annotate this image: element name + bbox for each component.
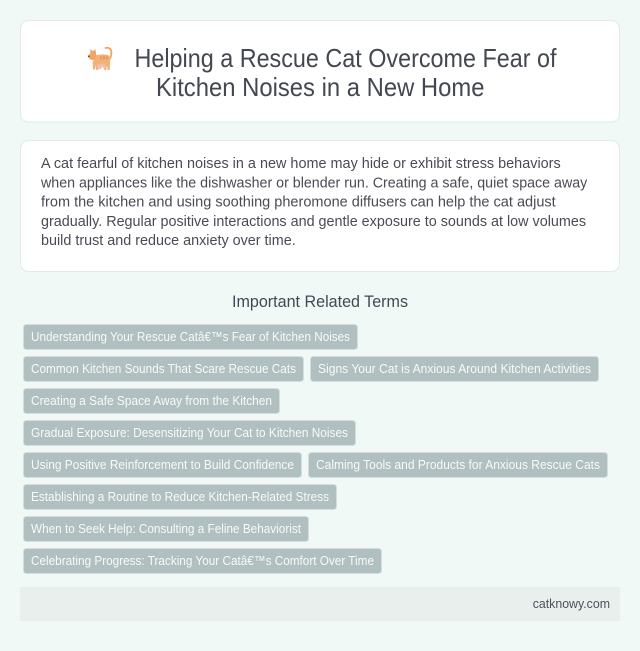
summary paragraph: from the kitchen and using soothing pheromone diffusers can help the cat adjust [41, 194, 556, 211]
chip: anxiety signs: Signs Your Cat is Anxious Around Kitchen Activities [318, 361, 591, 376]
chip: gradual exposure: Gradual Exposure: Desensitizing Your Cat to Kitchen Noises [31, 425, 348, 440]
summary paragraph: when appliances like the dishwasher or blender run. Creating a safe, quiet space away [40, 174, 588, 191]
chip: common sounds [24, 356, 304, 382]
heading: related terms: Important Related Terms [232, 292, 408, 311]
summary paragraph: build trust and reduce anxiety over time. [41, 232, 296, 249]
chip: seek help [24, 516, 308, 542]
footer bar [20, 587, 620, 621]
panel: title card [20, 20, 620, 122]
chip: common sounds: Common Kitchen Sounds That Scare Rescue Cats [31, 361, 296, 376]
chip: calming tools: Calming Tools and Products for Anxious Rescue Cats [316, 457, 600, 472]
panel: summary card [20, 140, 620, 272]
summary paragraph: gradually. Regular positive interactions and gentle exposure to sounds at low volumes [41, 213, 586, 230]
chip: routine: Establishing a Routine to Reduce Kitchen-Related Stress [31, 489, 329, 504]
title text: Helping a Rescue Cat Overcome Fear of [134, 43, 557, 73]
chip: safe space: Creating a Safe Space Away from the Kitchen [31, 393, 272, 408]
chip: safe space [24, 388, 280, 414]
icon: orange cat [88, 48, 111, 70]
chip: seek help: When to Seek Help: Consulting a Feline Behaviorist [31, 521, 301, 536]
summary paragraph: A cat fearful of kitchen noises in a new home may hide or exhibit stress behaviors [41, 155, 561, 172]
title text [134, 43, 557, 102]
chip: gradual exposure [24, 420, 356, 446]
chip: celebrating progress: Celebrating Progress: Tracking Your Catâ€™s Comfort Over Time [31, 553, 374, 568]
chip: celebrating progress [24, 548, 382, 574]
chip: routine [24, 484, 336, 510]
chip: positive reinforcement [24, 452, 302, 478]
related terms chips [24, 324, 608, 574]
summary paragraph [40, 155, 588, 249]
chip: understanding fear: Understanding Your Rescue Catâ€™s Fear of Kitchen Noises [31, 329, 350, 344]
chip: calming tools [308, 452, 608, 478]
chip: anxiety signs [310, 356, 598, 382]
chip: positive reinforcement: Using Positive Reinforcement to Build Confidence [31, 457, 294, 472]
title text: Kitchen Noises in a New Home [156, 72, 484, 102]
chip: understanding fear [24, 324, 358, 350]
footer source text: catknowy.com [533, 597, 610, 611]
